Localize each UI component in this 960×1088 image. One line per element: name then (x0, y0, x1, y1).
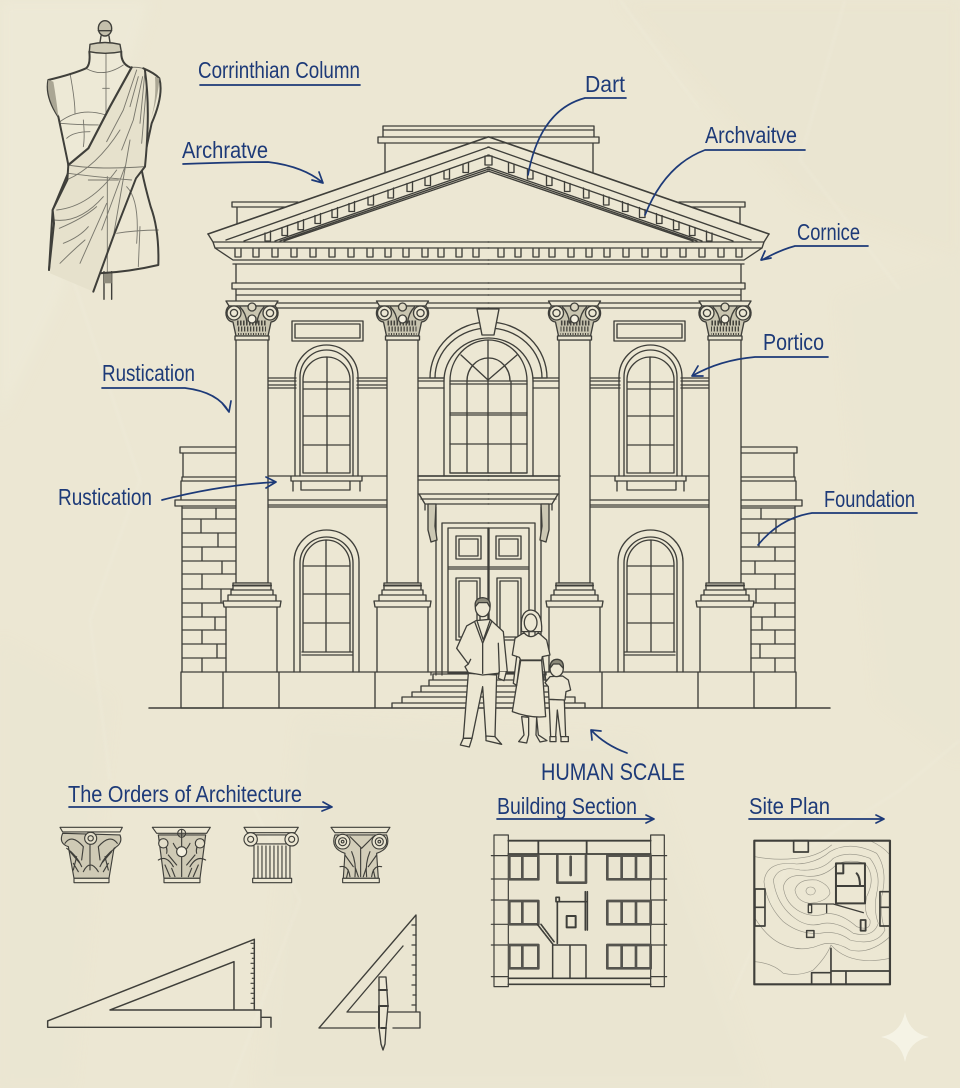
plinths (181, 672, 489, 708)
label: Foundation: Foundation (824, 486, 915, 512)
site plan drawing (754, 841, 890, 984)
label: Archratve: Archratve (182, 137, 268, 163)
label: Portico (692, 329, 828, 376)
human figures (457, 598, 571, 747)
label: Archvaitve: Archvaitve (705, 122, 797, 148)
label: Portico: Portico (763, 329, 824, 355)
capital two (152, 827, 210, 883)
sparkle watermark (881, 1012, 929, 1062)
drape fill (50, 67, 151, 292)
column two (387, 340, 418, 583)
central arched window (149, 156, 830, 708)
left half of facade (175, 137, 489, 708)
pediment rake (208, 137, 488, 234)
architectural orders capitals (60, 827, 390, 883)
drape folds (54, 67, 158, 273)
building elevation (149, 126, 830, 708)
label: Foundation (758, 486, 917, 545)
torso (48, 52, 161, 273)
drafting triangle, large (48, 939, 271, 1027)
finial and collar (98, 21, 112, 36)
string course (268, 378, 444, 388)
bracket (428, 504, 437, 542)
entablature (232, 283, 489, 308)
rusticated masonry (182, 506, 236, 672)
steps (392, 674, 489, 708)
label: Rustication upper: Rustication (102, 360, 195, 386)
attic block behind pediment (232, 126, 745, 224)
heading: The Orders of Architecture: The Orders of Architecture (68, 781, 302, 807)
wing cornice (175, 447, 236, 506)
door surround (418, 476, 489, 675)
label: Corrinthian Column: Corrinthian Column (198, 57, 360, 83)
heading: Building Section: Building Section (497, 793, 637, 819)
mannequin with draped fabric (48, 21, 161, 299)
label: Archvaitve (645, 122, 805, 215)
rake dentils (265, 162, 468, 241)
label: Cornice (761, 219, 868, 260)
drape edges (68, 67, 132, 165)
label: Dart: Dart (585, 71, 626, 97)
label: Human Scale: HUMAN SCALE (541, 759, 685, 786)
mirrored right half of facade (488, 137, 802, 708)
label: Cornice: Cornice (797, 219, 860, 245)
floor plan drawing (491, 835, 667, 987)
horizontal dentils (235, 249, 479, 257)
woman (512, 610, 550, 743)
heading: Site Plan: Site Plan (749, 793, 830, 819)
contour lines (755, 841, 890, 974)
child (545, 659, 571, 742)
capital three (244, 827, 298, 883)
pencil (379, 977, 388, 1050)
upper window (295, 345, 358, 476)
capital one (60, 827, 122, 883)
set square with pencil (319, 915, 420, 1050)
sill and lower band (268, 476, 387, 507)
label: Archratve (182, 137, 323, 183)
stand pole (104, 272, 112, 299)
rooms (509, 856, 651, 968)
label: Rustication lower (58, 477, 276, 510)
label: Rustication lower: Rustication (58, 484, 152, 510)
label: Rustication upper (102, 360, 231, 412)
label: Human Scale (541, 730, 685, 786)
column one (236, 337, 268, 583)
lower window (294, 530, 359, 672)
label: Dart (528, 71, 626, 175)
wall panel (292, 321, 363, 341)
centre dentil of pediment (485, 156, 492, 165)
man (457, 598, 507, 747)
capital four (331, 827, 390, 883)
heading: Site Plan (749, 793, 884, 823)
